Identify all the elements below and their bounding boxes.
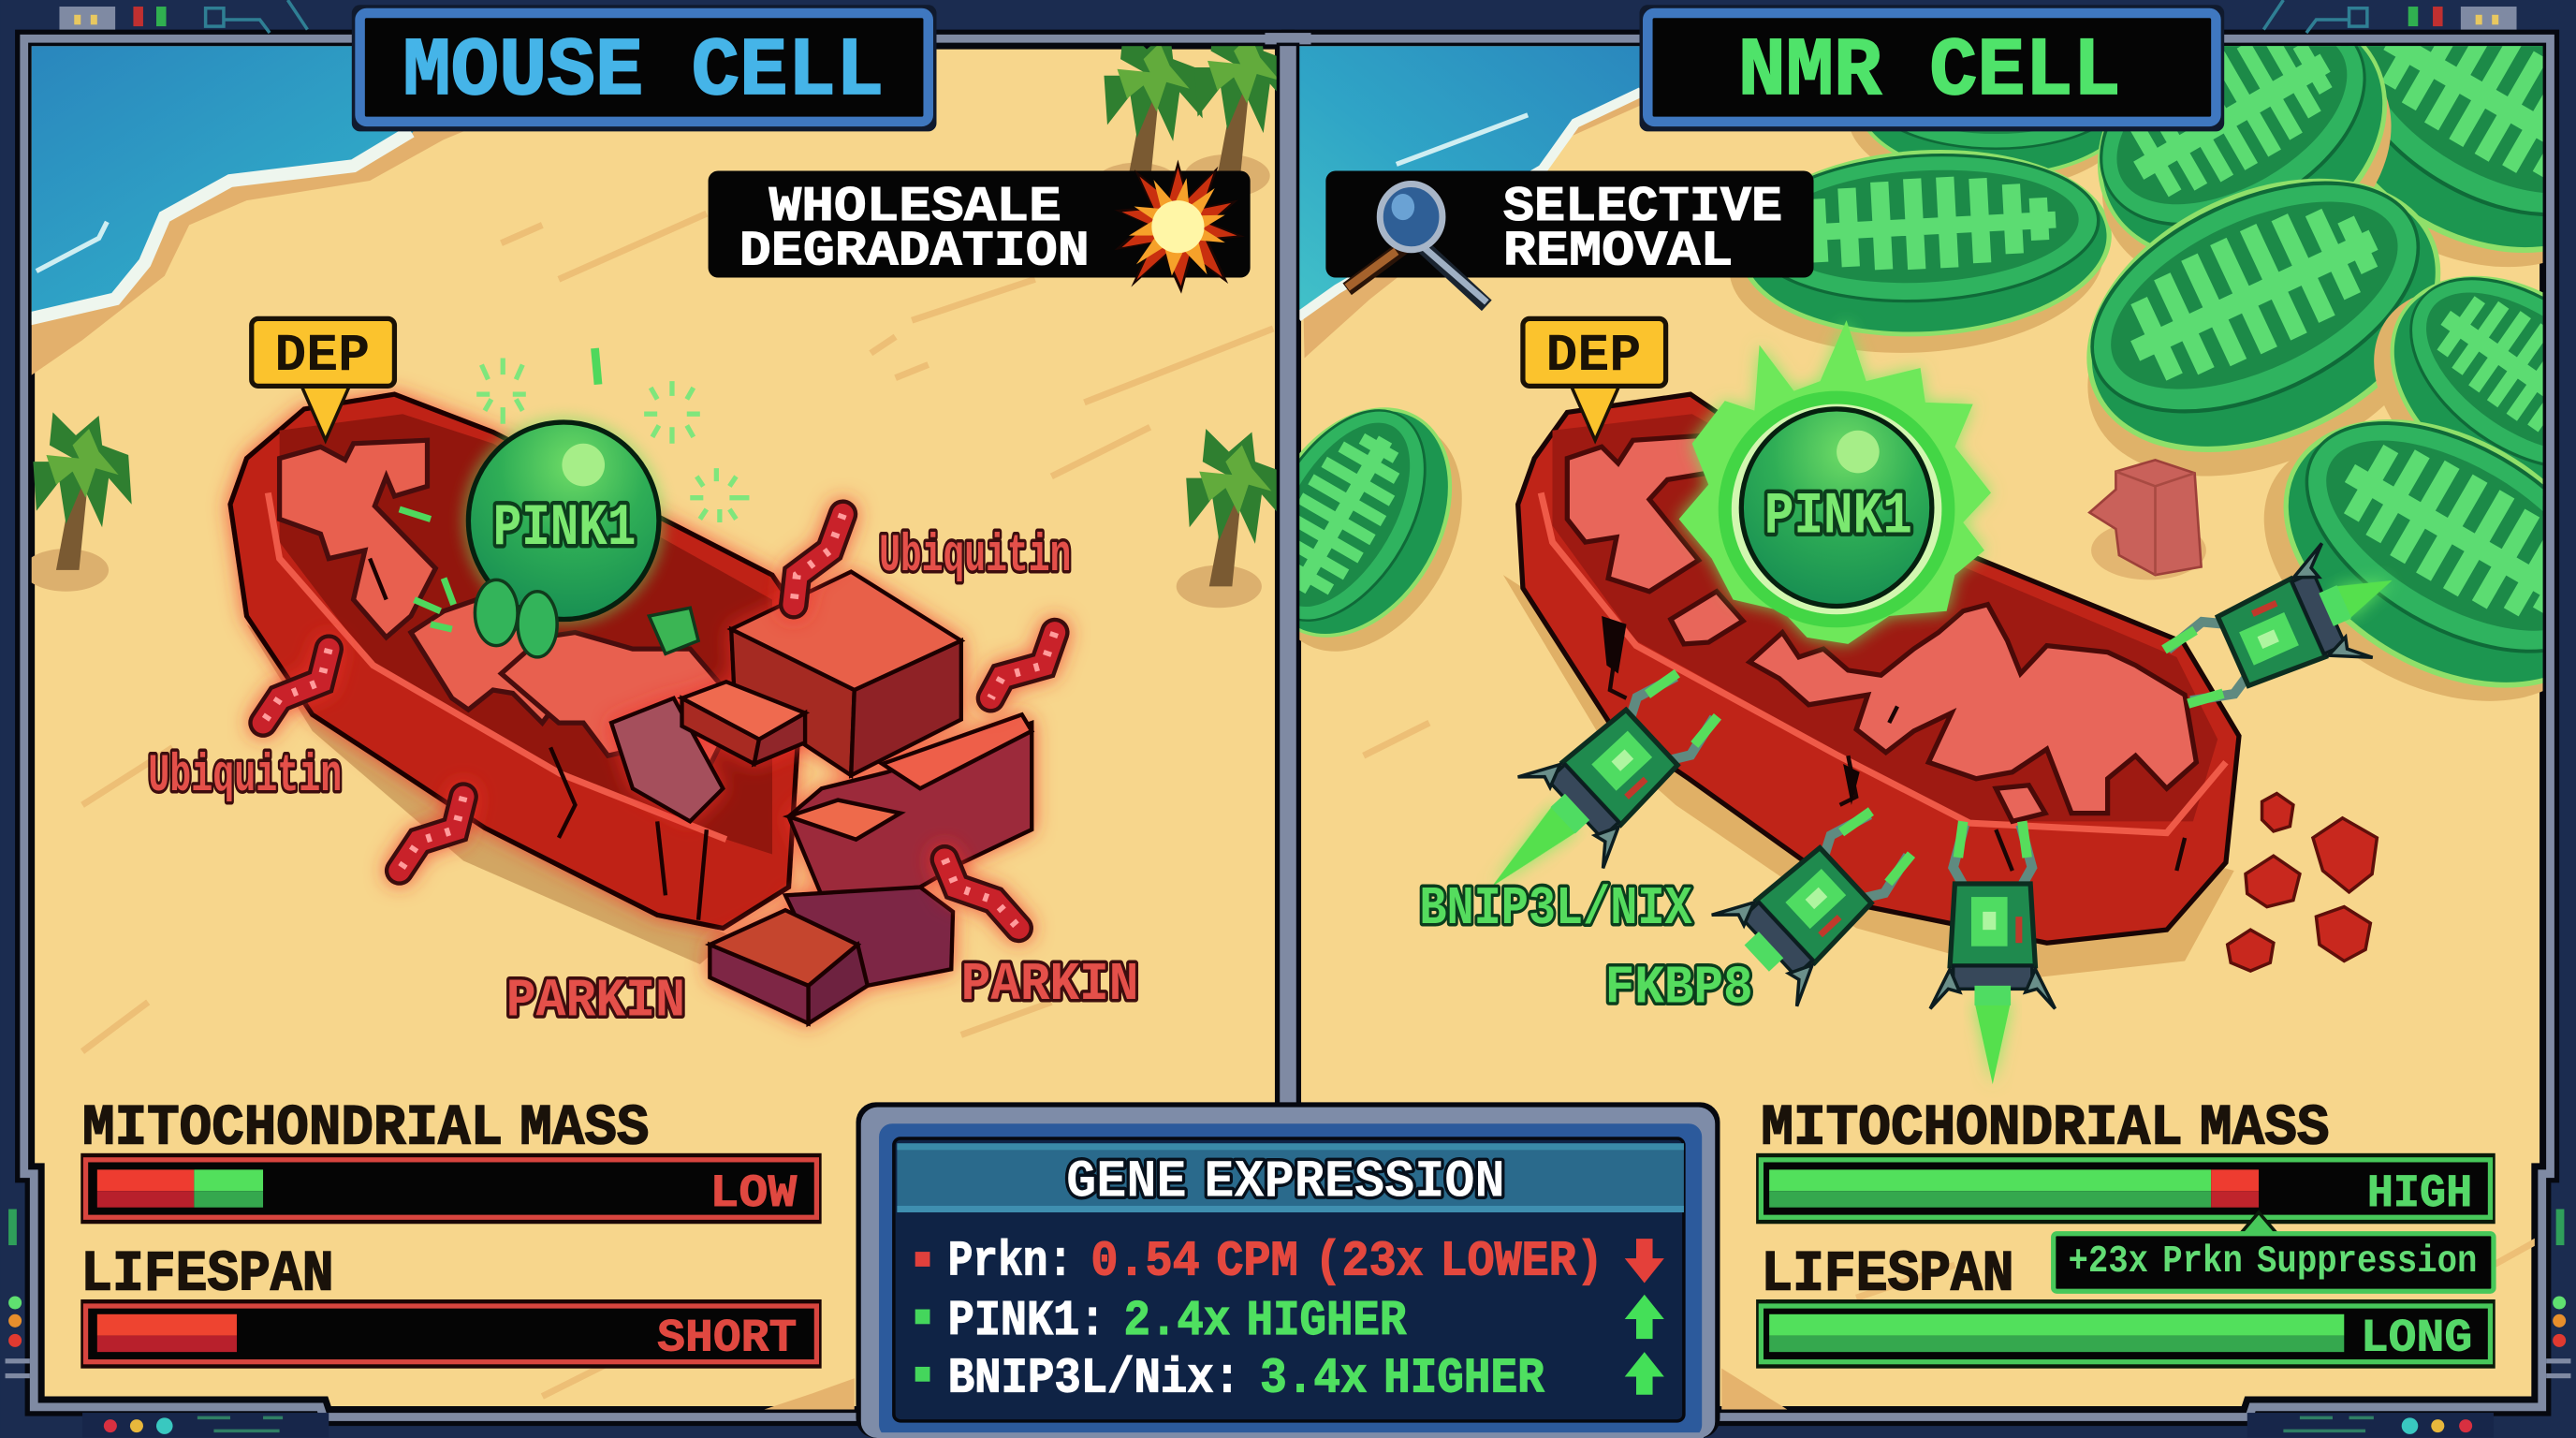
label: ubiquitin left: Ubiquitin [148,746,342,806]
icon: explosion [1114,160,1245,294]
label: BNIP3L/NIX: BNIP3L/NIX [1419,879,1692,940]
callout text [739,179,1090,280]
label: parkin right: PARKIN [961,955,1138,1016]
DEP tag (NMR): DEP [1545,326,1641,386]
row: BNIP3L/Nix [915,1350,1664,1406]
decorative frame: left [32,46,1278,1410]
robot 3 [1930,821,2055,1084]
label: ubiquitin right: Ubiquitin [879,526,1071,586]
bar: mitochondrial mass low: LOW [710,1167,798,1220]
bar: lifespan long: LONG [2361,1312,2472,1364]
receptor robots [1449,523,2418,1084]
PINK1 sphere (NMR) [1741,409,1932,606]
sand streaks [82,213,1273,1397]
label: PINK1 NMR: PINK1 [1764,483,1912,550]
label: parkin left: PARKIN [506,971,685,1032]
title: NMR cell: NMR CELL [1738,26,2121,119]
ocean and shore [32,46,463,375]
heading: mitochondrial mass: MITOCHONDRIAL MASS [1761,1096,2329,1161]
callout text: WHOLESALE [769,179,1061,235]
center divider [1278,44,1298,1106]
row: BNIP3L/Nix: BNIP3L/Nix: [948,1350,1240,1406]
cristae [1567,435,2196,821]
top bar connector [1265,33,1311,44]
bar: mitochondrial mass low [80,1153,822,1224]
corner dune [1721,1369,1787,1410]
panel: mouse cell beach scene [23,18,1293,1410]
title: mouse cell [352,5,936,131]
sand streaks [1364,723,2538,1298]
DEP tag (mouse): DEP [274,326,370,386]
heading: mitochondrial mass: MITOCHONDRIAL MASS [82,1096,649,1161]
panel: NMR stats [1756,1096,2496,1369]
palm trees [23,18,1293,608]
PINK1 burst glow [1679,320,1991,644]
mouse mitochondrion [230,394,805,928]
callout: +23x Prkn suppression [2054,1212,2494,1291]
callout text: REMOVAL [1503,224,1734,280]
frame electronics: top right [2263,0,2517,33]
DEP tag (mouse) [252,318,394,440]
robot 1 BNIP3L [1490,668,1721,888]
decorative frame: right [1298,46,2543,1410]
corner dune [764,1378,855,1410]
panel: NMR cell beach scene [1299,46,2543,1410]
bar: mitochondrial mass high: HIGH [2367,1167,2472,1220]
frame electronics: left column LEDs [6,1209,30,1378]
callout text: DEGRADATION [739,224,1090,280]
robot 4 [2161,542,2393,709]
row: Prkn: Prkn: [948,1234,1073,1290]
green sparkles [400,348,749,629]
bar: lifespan long [1756,1299,2496,1369]
panel: gene expression [856,1102,1720,1438]
callout text: SELECTIVE [1503,179,1782,235]
row: BNIP3L/Nix: 3.4x HIGHER [1260,1350,1544,1406]
row: PINK1: PINK1: [948,1293,1105,1349]
row: PINK1: 2.4x HIGHER [1124,1293,1407,1349]
DEP tag (NMR) [1523,318,1666,440]
callout text [1503,179,1782,280]
heading: lifespan: LIFESPAN [80,1242,334,1307]
label: FKBP8: FKBP8 [1605,958,1753,1019]
header bar: GENE EXPRESSION [1066,1152,1505,1211]
bar: lifespan short [80,1299,822,1369]
debris fragments [2228,794,2377,971]
title: mouse cell: MOUSE CELL [402,26,884,119]
panel: mouse stats [80,1096,822,1369]
title: NMR cell [1640,5,2224,131]
ubiquitin chains [263,514,1055,928]
frame electronics: top left [59,0,307,33]
degraded block cubes [611,572,1032,1023]
robot 2 FKBP8 [1711,807,1915,1007]
NMR mitochondrion [1518,394,2239,943]
icon: magnifier with forceps [1347,184,1486,305]
cristae [280,440,739,772]
explosion icon and callout: wholesale degradation [709,160,1251,294]
callout: +23x Prkn suppression: +23x Prkn Suppression [2068,1240,2477,1284]
frame electronics: right column LEDs [2546,1209,2570,1378]
bar: mitochondrial mass high [1756,1153,2496,1224]
row: PINK1 [915,1293,1664,1349]
frame electronics: bottom right LEDs [2247,1413,2494,1437]
frame electronics: bottom left LEDs [82,1413,329,1437]
PINK1 sphere (mouse) [461,416,698,657]
row: Prkn: 0.54 CPM (23x LOWER) [1090,1234,1603,1290]
ocean and shore [1299,46,1640,358]
bar: lifespan short: SHORT [657,1312,797,1364]
header bar [897,1143,1684,1212]
mitochondrion shadow [247,624,731,964]
small red protein cube [2089,460,2206,580]
heading: lifespan: LIFESPAN [1761,1242,2014,1307]
healthy green mitochondria [1218,0,2576,759]
label: PINK1 mouse: PINK1 [493,494,636,562]
NMR mitochondrion shadow [1503,575,2234,977]
callout: selective removal [1325,170,1814,305]
